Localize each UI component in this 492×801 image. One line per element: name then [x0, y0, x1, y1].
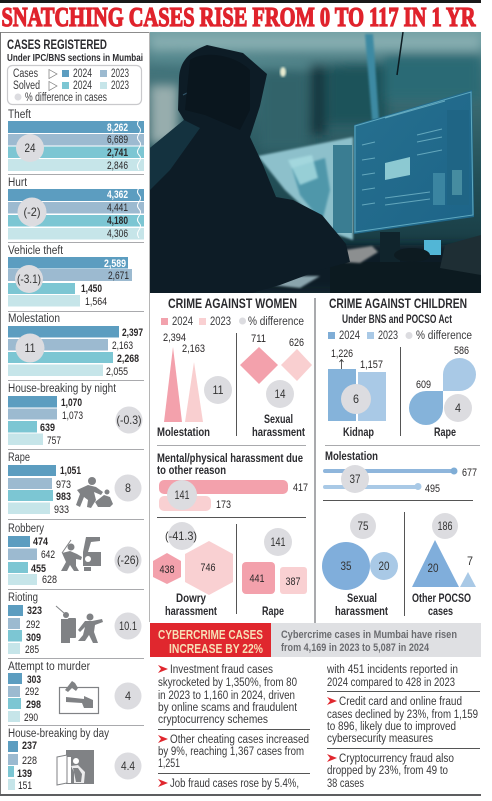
chart: theft: 24 — [24, 141, 36, 155]
chart: attempt to murder: 298 — [26, 699, 41, 711]
chart: hurt: 4,362 — [107, 189, 128, 201]
legend: 2024 — [73, 68, 92, 80]
legend: % difference — [248, 316, 304, 328]
text block: cybercrime left column — [158, 664, 310, 790]
chart: robbery: 628 — [42, 574, 57, 586]
chart: mental/physical harassment: 141 — [174, 488, 190, 502]
panel: crime against women — [153, 296, 312, 618]
chart: hurt — [8, 177, 144, 240]
chart: kidnap bars: 6 — [353, 392, 359, 406]
legend — [328, 330, 472, 342]
legend: 2023 — [210, 316, 231, 328]
chart: rape rounded squares: 441 — [250, 573, 264, 585]
chart: sexual harassment circles: harassment — [335, 606, 388, 618]
icon: burglar at window — [57, 750, 94, 785]
chart: theft: 6,689 — [107, 134, 128, 146]
chart: rioting: 323 — [27, 605, 42, 617]
chart: attempt to murder: 290 — [24, 712, 38, 724]
red callout: CYBERCRIME CASES — [158, 627, 263, 642]
legend: Solved — [13, 80, 40, 92]
photo: hooded hacker at computer monitors — [150, 32, 481, 293]
chart: rioting: Rioting — [8, 592, 38, 604]
legend: 2023 — [378, 330, 398, 342]
chart: sexual harassment diamonds — [240, 333, 312, 439]
chart: dowry harassment hexagons: harassment — [165, 606, 217, 618]
chart: rape: 8 — [125, 481, 131, 495]
chart: hurt: Hurt — [8, 177, 28, 189]
chart: other POCSO triangles — [412, 513, 476, 618]
chart: sexual harassment diamonds: 14 — [274, 387, 286, 401]
chart: hurt: 4,306 — [107, 228, 128, 240]
chart: vehicle theft: (-3.1) — [17, 272, 41, 286]
panel: crime against children — [322, 296, 480, 618]
legend: 2024 — [73, 80, 92, 92]
chart: mental/physical harassment: to other reason — [157, 465, 226, 477]
chart: robbery: Robbery — [8, 523, 44, 535]
text block: cybercrime right column: to 896, likely due to improved — [327, 721, 456, 733]
chart: dowry harassment hexagons — [153, 522, 233, 618]
chart: sexual harassment circles — [322, 513, 398, 618]
chart: rape teardrops: 4 — [455, 401, 461, 415]
red callout — [150, 623, 271, 657]
chart: rioting: 292 — [26, 619, 40, 631]
chart: molestation: 2,163 — [112, 340, 133, 352]
chart: house-breaking by day: 4.4 — [121, 759, 135, 773]
chart: molestation spikes: 2,394 — [163, 332, 186, 344]
text block: cybercrime left column: in 2023 to 1,160 in 2024, driven — [158, 690, 295, 702]
chart: theft: Theft — [8, 109, 32, 121]
chart: rape: 933 — [54, 504, 69, 516]
chart: attempt to murder: 292 — [25, 686, 39, 698]
chart: vehicle theft: 2,589 — [104, 258, 126, 270]
legend — [8, 66, 142, 104]
legend: Cases — [13, 68, 38, 80]
chart: robbery: (-26) — [117, 553, 139, 567]
chart: molestation: Molestation — [8, 313, 60, 325]
hand on keyboard — [345, 246, 378, 263]
chart: molestation spikes: Molestation — [157, 427, 210, 439]
chart: other POCSO triangles: 7 — [467, 554, 473, 568]
chart: rioting: 309 — [26, 632, 41, 644]
top black rule — [0, 0, 481, 3]
text block: cybercrime left column: Job fraud cases rose by 5.4%, — [170, 778, 299, 790]
chart: kidnap bars: Kidnap — [343, 427, 374, 439]
text block: cybercrime left column: by online scams and fraudulent — [158, 702, 298, 714]
chart: theft: 2,741 — [107, 147, 128, 159]
text block: cybercrime left column: cryptocurrency schemes — [158, 714, 268, 726]
chart: rioting: 10.1 — [119, 619, 137, 633]
text block: cybercrime right column: Cryptocurrency fraud also — [339, 753, 454, 765]
chart: attempt to murder: 303 — [27, 674, 41, 686]
chart: attempt to murder: 4 — [125, 689, 131, 703]
legend: 2024 — [172, 316, 193, 328]
text block: cybercrime right column — [326, 664, 480, 790]
subheading: Under BNS and POCSO Act — [342, 314, 452, 326]
chart: molestation lollipops: 495 — [425, 483, 440, 495]
chart: robbery — [8, 523, 142, 586]
chart: molestation: 11 — [24, 341, 36, 355]
text block: cybercrime right column: with 451 incidents reported in — [326, 664, 458, 676]
chart: molestation lollipops: 677 — [462, 467, 477, 479]
chart: house-breaking by night: 1,073 — [62, 410, 83, 422]
chart: robbery: 455 — [31, 563, 46, 575]
legend: % difference in cases — [25, 92, 107, 104]
chart: vehicle theft: 1,564 — [85, 296, 107, 308]
chart: robbery: 642 — [41, 549, 55, 561]
chart: house-breaking by day: 151 — [18, 780, 32, 792]
text block: cybercrime left column: Other cheating cases increased — [170, 734, 309, 746]
chart: rape rounded squares: 387 — [286, 576, 300, 588]
text block: cybercrime left column: Investment fraud cases — [170, 664, 273, 676]
chart: rape rounded squares — [242, 528, 307, 618]
chart: molestation lollipops — [323, 451, 477, 495]
legend: % difference — [416, 330, 472, 342]
chart: house-breaking by night — [8, 383, 142, 447]
chart: kidnap bars: 1,157 — [360, 359, 383, 371]
chart: vehicle theft: 2,671 — [108, 270, 129, 282]
text block: cybercrime right column: 2024 compared to 428 in 2023 — [327, 677, 455, 689]
chart: molestation spikes: 11 — [212, 383, 224, 397]
chart: mental/physical harassment: 417 — [293, 482, 308, 494]
chart: kidnap bars: 1,226 — [331, 348, 353, 360]
legend: 2023 — [111, 68, 129, 80]
legend — [161, 316, 304, 328]
chart: attempt to murder — [8, 661, 142, 724]
chart: sexual harassment circles: 75 — [358, 519, 369, 533]
chart: rape teardrops: 586 — [454, 345, 469, 357]
chart: rape: 973 — [56, 479, 71, 491]
chart: dowry harassment hexagons: (-41.3) — [165, 529, 197, 543]
chart: molestation spikes — [157, 332, 232, 439]
chart: other POCSO triangles: 186 — [438, 519, 453, 533]
chart: rape teardrops: Rape — [434, 427, 456, 439]
chart: sexual harassment circles: 35 — [340, 559, 352, 573]
chart: molestation: 2,397 — [122, 327, 143, 339]
chart: other POCSO triangles: cases — [428, 606, 453, 618]
chart: vehicle theft — [8, 245, 132, 308]
chart: molestation lollipops: Molestation — [325, 451, 378, 463]
chart: rioting: 285 — [25, 644, 39, 656]
chart: other POCSO triangles: 20 — [428, 561, 439, 575]
chart: mental/physical harassment — [157, 453, 308, 511]
chart: sexual harassment circles: 20 — [378, 559, 390, 573]
text block: cybercrime right column: cybersecurity measures — [327, 733, 433, 745]
text block: cybercrime left column: by 9%, reaching 1,367 cases from — [158, 746, 304, 758]
right monitor — [354, 90, 474, 234]
chart: molestation spikes: 2,163 — [182, 343, 205, 355]
chart: sexual harassment diamonds: 626 — [289, 337, 304, 349]
chart: rape: Rape — [8, 452, 30, 464]
chart: theft — [8, 109, 144, 172]
grey summary: Cybercrime cases in Mumbai have risen — [281, 629, 457, 641]
grey summary — [271, 623, 481, 657]
chart: house-breaking by day: House-breaking by day — [8, 728, 109, 740]
chart: house-breaking by night: 639 — [40, 422, 55, 434]
chart: hurt: 4,180 — [107, 215, 128, 227]
legend: 2023 — [111, 80, 129, 92]
chart: mental/physical harassment: Mental/physical harassment due — [157, 453, 303, 465]
hooded figure — [150, 45, 350, 293]
chart: sexual harassment diamonds: 711 — [251, 333, 266, 345]
chart: house-breaking by night: House-breaking by night — [8, 383, 117, 395]
chart: mental/physical harassment: 173 — [216, 499, 231, 511]
chart: sexual harassment diamonds: harassment — [252, 427, 305, 439]
chart: rape: 1,051 — [60, 465, 81, 477]
chart: molestation lollipops: 37 — [350, 472, 361, 486]
chart: attempt to murder: Attempt to murder — [8, 661, 90, 673]
panel: cybercrime header — [150, 623, 481, 657]
chart: house-breaking by day: 228 — [22, 755, 37, 767]
chart: hurt: (-2) — [24, 205, 40, 219]
chart: rioting — [8, 592, 142, 656]
chart: rape rounded squares: Rape — [262, 606, 284, 618]
chart: house-breaking by night: 757 — [47, 435, 61, 447]
left monitor — [258, 137, 353, 240]
icon: assault — [76, 477, 113, 508]
chart: vehicle theft: Vehicle theft — [8, 245, 64, 257]
chart: house-breaking by day — [8, 728, 142, 792]
chart: rape rounded squares: 141 — [270, 535, 286, 549]
chart: kidnap bars — [328, 348, 386, 439]
icon: robbery — [61, 537, 101, 571]
red callout: INCREASE BY 22% — [169, 641, 263, 656]
chart: other POCSO triangles: Other POCSO — [412, 593, 471, 605]
bottom rule — [0, 794, 481, 796]
chart: rape: 983 — [56, 491, 71, 503]
chart: house-breaking by day: 237 — [22, 740, 37, 752]
panel subheading: Under IPC/BNS sections in Mumbai — [7, 53, 143, 64]
chart: theft: 2,846 — [107, 160, 128, 172]
text block: cybercrime left column: 1,251 — [158, 758, 180, 770]
chart: molestation — [8, 313, 143, 378]
chart: rape — [8, 452, 142, 516]
chart: sexual harassment diamonds: Sexual — [264, 414, 293, 426]
text block: cybercrime right column: 38 cases — [327, 778, 364, 790]
chart: dowry harassment hexagons: 746 — [200, 562, 216, 574]
chart: molestation: 2,055 — [106, 366, 128, 378]
icon: riot police and runner — [56, 606, 103, 643]
chart: molestation: 2,268 — [117, 353, 139, 365]
chart: rape teardrops — [409, 345, 476, 439]
chart: house-breaking by day: 139 — [17, 768, 32, 780]
chart: hurt: 4,441 — [107, 202, 128, 214]
desk and stand — [380, 232, 400, 246]
chart: house-breaking by night: (-0.3) — [116, 413, 142, 427]
chart: sexual harassment circles: Sexual — [347, 593, 377, 605]
chart: robbery: 474 — [33, 536, 49, 548]
chart: dowry harassment hexagons: 438 — [160, 564, 174, 576]
icon: attempt to murder — [60, 681, 98, 714]
chart: house-breaking by night: 1,070 — [61, 397, 82, 409]
chart: vehicle theft: 1,450 — [81, 283, 102, 295]
heading: CRIME AGAINST WOMEN — [168, 296, 297, 311]
grey summary: from 4,169 in 2023 to 5,087 in 2024 — [281, 642, 430, 654]
panel: cases registered — [0, 32, 150, 796]
chart: dowry harassment hexagons: Dowry — [176, 593, 207, 605]
legend: 2024 — [339, 330, 360, 342]
chart: theft: 8,262 — [107, 122, 128, 134]
text block: cybercrime right column: dropped by 23%, from 49 to — [327, 765, 448, 777]
panel heading: CASES REGISTERED — [7, 37, 107, 52]
text block: cybercrime right column: Credit card and online fraud — [339, 696, 462, 708]
text block: cybercrime left column: skyrocketed by 1,350%, from 80 — [158, 677, 297, 689]
chart: rape teardrops: 609 — [416, 379, 431, 391]
